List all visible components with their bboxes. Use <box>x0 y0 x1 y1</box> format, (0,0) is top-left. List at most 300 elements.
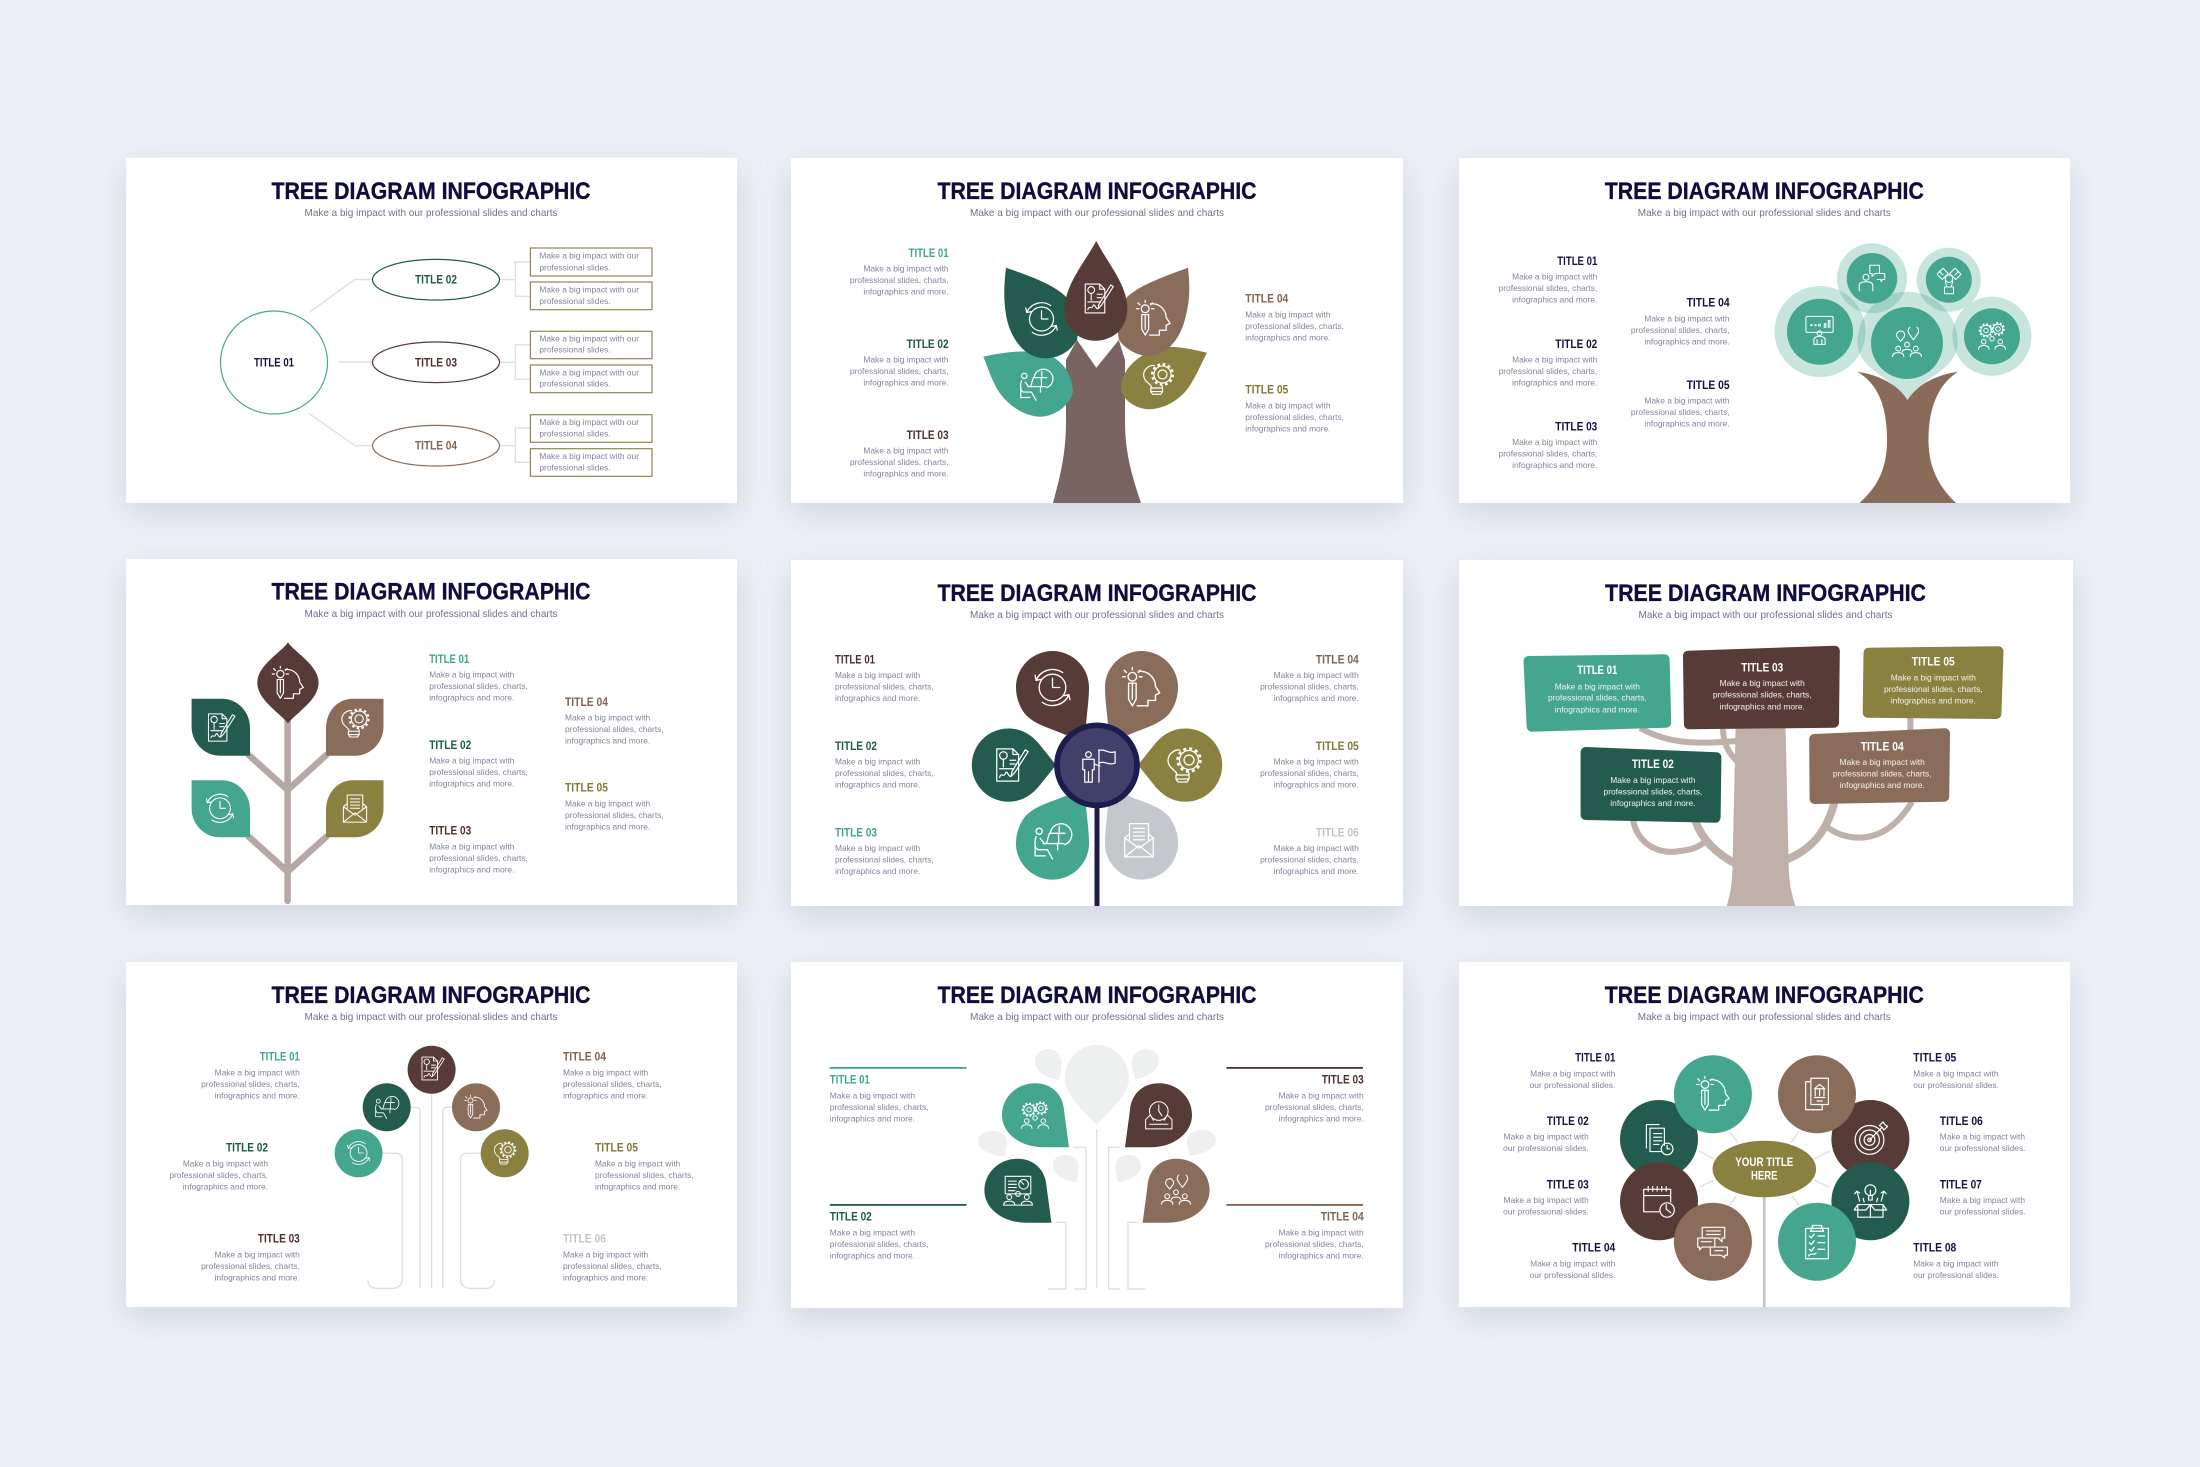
stem <box>1094 800 1100 906</box>
text: title 02: Make a big impact with <box>830 1228 915 1238</box>
text: title 06: infographics and more. <box>1274 866 1359 876</box>
text: title 01: infographics and more. <box>215 1090 300 1100</box>
text: title 02: infographics and more. <box>1512 378 1597 388</box>
text: title 04: professional slides, charts, <box>563 1079 662 1089</box>
panel 1: outline tree <box>126 158 737 503</box>
node: title 02 <box>372 259 500 300</box>
node: dark green <box>363 1083 411 1131</box>
text: title 05: Make a big impact with <box>1644 396 1730 406</box>
text: title 07: TITLE 07 <box>1940 1178 1982 1191</box>
text: title 02 <box>169 1142 268 1191</box>
card: title 02: TITLE 02 <box>1632 758 1674 771</box>
panel 2: leaf tree <box>791 158 1403 503</box>
text: title 01 <box>1499 255 1598 305</box>
node: teal <box>335 1129 383 1177</box>
heading <box>938 580 1256 621</box>
text: title 02: TITLE 02 <box>907 338 949 351</box>
text boxes: professional slides. <box>539 262 611 272</box>
text: title 01: Make a big impact with <box>429 670 515 680</box>
stem <box>1763 1195 1766 1307</box>
text: title 02: Make a big impact with <box>429 756 515 766</box>
text: title 01: TITLE 01 <box>830 1073 870 1086</box>
text: title 03: TITLE 03 <box>258 1233 300 1246</box>
node: olive <box>481 1129 529 1177</box>
leaf: dark brown <box>257 642 319 723</box>
text: title 01: professional slides, charts, <box>1499 283 1597 293</box>
text: title 04: Make a big impact with <box>1279 1228 1364 1238</box>
text: title 05: TITLE 05 <box>1245 384 1289 397</box>
node: title 02: TITLE 02 <box>415 274 457 287</box>
text: title 06: TITLE 06 <box>563 1233 606 1246</box>
text boxes: Make a big impact with our <box>539 451 639 461</box>
circle node: presentation <box>1787 299 1853 365</box>
text: title 06: Make a big impact with <box>1940 1132 2025 1142</box>
text: title 02: professional slides, charts, <box>850 366 949 376</box>
leaf: dark green <box>1004 268 1078 358</box>
heading <box>938 178 1256 219</box>
text: title 05: infographics and more. <box>1644 419 1730 429</box>
card: title 01: professional slides, charts, <box>1548 693 1647 703</box>
text: title 02: TITLE 02 <box>1547 1115 1589 1128</box>
text: title 03: professional slides, charts, <box>429 853 528 863</box>
root node: title 01 <box>220 311 328 414</box>
text: title 01: Make a big impact with <box>215 1067 300 1077</box>
text: title 03: professional slides, charts, <box>835 854 934 864</box>
text: title 01: Make a big impact with <box>1512 272 1598 282</box>
text: title 03: Make a big impact with <box>1512 437 1598 447</box>
card: title 01: infographics and more. <box>1555 704 1640 714</box>
text: title 04: infographics and more. <box>563 1090 648 1100</box>
text: title 01: our professional slides. <box>1530 1080 1615 1090</box>
text: title 06: Make a big impact with <box>563 1249 649 1259</box>
text: title 03: TITLE 03 <box>1555 420 1598 433</box>
text boxes: Make a big impact with our <box>539 251 639 261</box>
text: title 01: TITLE 01 <box>909 247 949 260</box>
text: title 03: Make a big impact with <box>835 843 921 853</box>
card: title 05: professional slides, charts, <box>1884 684 1983 694</box>
card: title 03 <box>1688 651 1835 724</box>
text: title 06 <box>1940 1115 2025 1153</box>
heading: Make a big impact with our professional slides and charts <box>304 609 558 620</box>
text: title 05: infographics and more. <box>1245 423 1331 433</box>
card: title 04: TITLE 04 <box>1861 741 1904 754</box>
text: title 02: Make a big impact with <box>1512 355 1598 365</box>
card: title 03: Make a big impact with <box>1720 678 1805 688</box>
heading: TREE DIAGRAM INFOGRAPHIC <box>938 580 1256 607</box>
circle: light brown building <box>1778 1055 1856 1133</box>
text: title 05: professional slides, charts, <box>1631 407 1730 417</box>
text boxes: Make a big impact with our <box>539 417 639 427</box>
text: title 01: infographics and more. <box>429 693 514 703</box>
petal: light brown <box>1105 651 1178 735</box>
circle node: gears <box>1964 308 2020 364</box>
heading: TREE DIAGRAM INFOGRAPHIC <box>1605 580 1926 607</box>
text: title 05: TITLE 05 <box>1913 1052 1957 1065</box>
text: title 04 <box>1245 293 1344 342</box>
text: title 02: TITLE 02 <box>226 1142 268 1155</box>
text: title 05 <box>1631 379 1730 429</box>
petal: olive <box>1138 728 1222 802</box>
text: title 04: our professional slides. <box>1530 1270 1615 1280</box>
text: title 03: TITLE 03 <box>429 825 472 838</box>
text: title 01: TITLE 01 <box>260 1051 300 1064</box>
leaf: dark green <box>192 699 250 756</box>
text: title 05: Make a big impact with <box>1245 400 1331 410</box>
text: title 03 <box>201 1233 300 1282</box>
text boxes: Make a big impact with our <box>539 333 639 343</box>
text: title 01: infographics and more. <box>1512 295 1597 305</box>
text: title 02: professional slides, charts, <box>1499 366 1597 376</box>
text: title 01 <box>201 1051 300 1100</box>
card: title 01: TITLE 01 <box>1577 664 1618 677</box>
text: title 04: infographics and more. <box>565 736 650 746</box>
text: title 06 <box>1260 826 1359 876</box>
text: title 02 <box>830 1210 928 1260</box>
text: title 04 <box>1265 1210 1364 1260</box>
circle: teal <box>1674 1055 1752 1133</box>
text: title 02: infographics and more. <box>429 779 514 789</box>
panel 4: branch tree <box>126 559 737 905</box>
text: title 02: Make a big impact with <box>835 757 921 767</box>
text: title 04: Make a big impact with <box>1530 1258 1616 1268</box>
text: title 01: Make a big impact with <box>1530 1068 1616 1078</box>
text: title 01: Make a big impact with <box>835 670 921 680</box>
card: title 05 <box>1868 651 1998 714</box>
heading: TREE DIAGRAM INFOGRAPHIC <box>272 982 590 1009</box>
text: title 01: TITLE 01 <box>835 653 875 666</box>
text: title 04: infographics and more. <box>1274 693 1359 703</box>
card: title 03: professional slides, charts, <box>1713 690 1812 700</box>
text: title 03: infographics and more. <box>1278 1114 1364 1124</box>
circle node: locations <box>1871 307 1943 379</box>
text: title 01: TITLE 01 <box>429 653 470 666</box>
center node: person with flag <box>1057 725 1137 805</box>
text: title 03: TITLE 03 <box>835 826 877 839</box>
circle: dark green box <box>1831 1162 1909 1240</box>
text: title 02: infographics and more. <box>863 378 949 388</box>
text: title 03: infographics and more. <box>835 866 920 876</box>
text: title 07: our professional slides. <box>1940 1207 2025 1217</box>
text: title 04 <box>1530 1242 1616 1280</box>
card: title 01 <box>1528 659 1666 727</box>
leaf: teal <box>192 780 250 837</box>
text boxes <box>530 248 652 476</box>
node: dark brown <box>408 1046 456 1094</box>
node: title 03 <box>372 342 500 383</box>
text: title 01 <box>830 1073 928 1124</box>
heading: TREE DIAGRAM INFOGRAPHIC <box>272 178 590 205</box>
heading: Make a big impact with our professional slides and charts <box>304 1012 558 1023</box>
text: title 02: infographics and more. <box>183 1181 268 1191</box>
text: title 07 <box>1940 1178 2025 1216</box>
tree trunk and branches <box>1633 716 1912 906</box>
text: title 03: professional slides, charts, <box>1499 448 1597 458</box>
heading: Make a big impact with our professional slides and charts <box>304 208 558 219</box>
text: title 02: TITLE 02 <box>835 740 877 753</box>
node: light brown <box>452 1083 500 1131</box>
card: title 03: TITLE 03 <box>1741 661 1784 674</box>
tree trunk <box>1053 340 1141 503</box>
text: title 01: infographics and more. <box>835 693 920 703</box>
text: title 04 <box>563 1051 662 1100</box>
text: title 03: professional slides, charts, <box>201 1261 300 1271</box>
text: title 03 <box>850 429 949 479</box>
text: title 02: Make a big impact with <box>863 355 949 365</box>
text: title 04: Make a big impact with <box>1644 313 1730 323</box>
text: title 04: TITLE 04 <box>1687 297 1730 310</box>
text: title 01: professional slides, charts, <box>429 681 528 691</box>
text: title 04 <box>565 696 664 746</box>
branches <box>249 720 326 901</box>
card: title 04 <box>1814 733 1945 799</box>
text: title 04: TITLE 04 <box>1245 293 1289 306</box>
text boxes: professional slides. <box>539 429 611 439</box>
circle: light brown <box>1674 1203 1752 1281</box>
text: title 03 <box>1503 1178 1589 1216</box>
text: title 01 <box>835 653 934 703</box>
petal: teal <box>1016 796 1089 880</box>
text: title 04: TITLE 04 <box>565 696 608 709</box>
text: title 06: Make a big impact with <box>1274 843 1359 853</box>
tree trunk <box>1857 372 1958 503</box>
card: title 02: professional slides, charts, <box>1604 787 1702 797</box>
card: title 03: infographics and more. <box>1720 701 1805 711</box>
text: title 05: Make a big impact with <box>1274 757 1359 767</box>
text: title 03 <box>1265 1073 1364 1124</box>
heading <box>1605 982 1924 1023</box>
leaf: light brown <box>1118 268 1189 356</box>
text: title 04: TITLE 04 <box>563 1051 606 1064</box>
circle: dark brown target <box>1831 1100 1909 1178</box>
text: title 04: TITLE 04 <box>1321 1210 1364 1223</box>
heading: TREE DIAGRAM INFOGRAPHIC <box>272 579 590 606</box>
text: title 01 <box>429 653 528 703</box>
panel 9: radial circles tree <box>1459 962 2070 1307</box>
card: title 04: Make a big impact with <box>1840 757 1925 767</box>
card: title 04: professional slides, charts, <box>1833 769 1932 779</box>
card: title 05: infographics and more. <box>1891 695 1976 705</box>
text: title 01: infographics and more. <box>830 1114 915 1124</box>
text: title 05: our professional slides. <box>1913 1080 1999 1090</box>
rule: title 02 <box>830 1204 966 1206</box>
text: title 04: infographics and more. <box>1644 336 1730 346</box>
card: title 05: Make a big impact with <box>1891 672 1976 682</box>
card: title 02 <box>1586 752 1716 818</box>
text: title 05: TITLE 05 <box>565 782 608 795</box>
text: title 03 <box>835 826 934 876</box>
text: title 02: professional slides, charts, <box>830 1239 928 1249</box>
text boxes: Make a big impact with our <box>539 285 639 295</box>
heading: Make a big impact with our professional slides and charts <box>1638 208 1891 219</box>
text boxes: professional slides. <box>539 379 611 389</box>
text: title 02 <box>850 338 949 388</box>
text: title 01: Make a big impact with <box>863 264 949 274</box>
text: title 06: TITLE 06 <box>1316 826 1359 839</box>
circle: dark brown <box>1620 1162 1698 1240</box>
drop: dark green <box>984 1159 1051 1223</box>
text: title 01: professional slides, charts, <box>201 1079 300 1089</box>
heading: TREE DIAGRAM INFOGRAPHIC <box>938 982 1256 1009</box>
text: title 03: our professional slides. <box>1503 1207 1589 1217</box>
circle: dark green <box>1620 1100 1698 1178</box>
text: title 03: Make a big impact with <box>215 1249 300 1259</box>
text: title 04: infographics and more. <box>1278 1251 1364 1261</box>
text: title 05 <box>1913 1052 1999 1090</box>
circle node: discussion <box>1847 253 1897 304</box>
text: title 03: TITLE 03 <box>1547 1178 1589 1191</box>
card: title 02: infographics and more. <box>1610 798 1696 808</box>
leaf: dark brown <box>1064 241 1127 341</box>
heading: TREE DIAGRAM INFOGRAPHIC <box>938 178 1256 205</box>
text: title 05: Make a big impact with <box>595 1158 681 1168</box>
text: title 06: professional slides, charts, <box>1260 854 1359 864</box>
text: title 06: infographics and more. <box>563 1272 648 1282</box>
text: title 04: professional slides, charts, <box>565 724 664 734</box>
text: title 05: professional slides, charts, <box>565 810 664 820</box>
text: title 02: Make a big impact with <box>183 1158 268 1168</box>
panel 5: flower tree <box>791 560 1403 906</box>
text: title 05: TITLE 05 <box>595 1142 638 1155</box>
text: title 05: professional slides, charts, <box>595 1170 694 1180</box>
text: title 05: TITLE 05 <box>1687 379 1730 392</box>
text: title 02: professional slides, charts, <box>429 767 528 777</box>
text: title 03: Make a big impact with <box>1279 1091 1364 1101</box>
text boxes: professional slides. <box>539 296 611 306</box>
heading: TREE DIAGRAM INFOGRAPHIC <box>1605 178 1924 205</box>
text: title 02 <box>1499 338 1598 388</box>
text: title 01: infographics and more. <box>863 287 949 297</box>
card: title 02: Make a big impact with <box>1610 775 1696 785</box>
text: title 02: TITLE 02 <box>429 739 471 752</box>
text: title 04: Make a big impact with <box>565 713 651 723</box>
text: title 05: infographics and more. <box>595 1181 680 1191</box>
text: title 05: professional slides, charts, <box>1260 768 1359 778</box>
petal: dark brown <box>1016 651 1089 735</box>
text: title 01 <box>1530 1052 1616 1090</box>
text: title 03: infographics and more. <box>863 469 949 479</box>
text: title 02: our professional slides. <box>1503 1143 1589 1153</box>
text: title 06 <box>563 1233 662 1282</box>
background gray leaves <box>978 1045 1216 1182</box>
canopy halos <box>1774 243 2032 400</box>
drop: teal <box>1002 1083 1069 1147</box>
drop: dark brown <box>1125 1083 1192 1147</box>
text: title 02: infographics and more. <box>835 780 920 790</box>
circle: teal clipboard <box>1778 1203 1856 1281</box>
heading <box>272 982 590 1023</box>
heading <box>938 982 1256 1023</box>
heading: Make a big impact with our professional slides and charts <box>1638 610 1892 621</box>
text: title 05: infographics and more. <box>565 821 650 831</box>
text: title 03 <box>1499 420 1598 470</box>
text: title 02: TITLE 02 <box>830 1210 872 1223</box>
text: title 06: our professional slides. <box>1940 1143 2025 1153</box>
text: title 05 <box>565 782 664 831</box>
heading: Make a big impact with our professional slides and charts <box>970 1012 1224 1023</box>
root node: title 01: TITLE 01 <box>254 357 294 370</box>
text: title 08: our professional slides. <box>1913 1270 1999 1280</box>
text: title 06: professional slides, charts, <box>563 1261 662 1271</box>
text: title 08: Make a big impact with <box>1913 1258 1999 1268</box>
text: title 03: infographics and more. <box>429 864 514 874</box>
text: title 04: Make a big impact with <box>1245 309 1331 319</box>
panel 6: labelled box tree <box>1459 560 2073 906</box>
text: title 03: professional slides, charts, <box>1265 1102 1364 1112</box>
circle node: teamwork <box>1926 257 1972 303</box>
text: title 04: professional slides, charts, <box>1631 325 1730 335</box>
panel 3: circle canopy tree <box>1459 158 2070 503</box>
text: title 05: Make a big impact with <box>565 798 651 808</box>
text: title 01: TITLE 01 <box>1575 1052 1616 1065</box>
heading <box>1605 580 1926 621</box>
text: title 01: professional slides, charts, <box>835 681 934 691</box>
text: title 01 <box>850 247 949 297</box>
text: title 02 <box>429 739 528 789</box>
text: title 04: professional slides, charts, <box>1265 1239 1364 1249</box>
text: title 02: TITLE 02 <box>1555 338 1597 351</box>
leaf: olive <box>1121 347 1207 409</box>
node: title 03: TITLE 03 <box>415 356 457 369</box>
text: title 05: professional slides, charts, <box>1245 412 1344 422</box>
text: title 03: Make a big impact with <box>863 446 949 456</box>
petal: dark green <box>972 728 1056 802</box>
text: title 04: professional slides, charts, <box>1260 681 1359 691</box>
card: title 01: Make a big impact with <box>1555 681 1640 691</box>
text: title 03: infographics and more. <box>215 1272 300 1282</box>
text: title 01: Make a big impact with <box>830 1091 915 1101</box>
text: title 02 <box>835 740 934 790</box>
heading: Make a big impact with our professional slides and charts <box>970 610 1224 621</box>
text: title 05: TITLE 05 <box>1316 740 1359 753</box>
text: title 03: infographics and more. <box>1512 460 1597 470</box>
text: title 05 <box>1260 740 1359 790</box>
text: title 02: professional slides, charts, <box>169 1170 268 1180</box>
text: title 04 <box>1631 297 1730 346</box>
leaf: teal <box>983 351 1073 417</box>
center node: your title here: HERE <box>1751 1169 1778 1182</box>
text: title 03: professional slides, charts, <box>850 457 949 467</box>
text: title 03: TITLE 03 <box>907 429 949 442</box>
text: title 04: professional slides, charts, <box>1245 321 1344 331</box>
rule: title 01 <box>830 1067 966 1069</box>
rule: title 04 <box>1226 1204 1363 1206</box>
text: title 03: Make a big impact with <box>1504 1195 1589 1205</box>
text: title 01: TITLE 01 <box>1557 255 1598 268</box>
text: title 04 <box>1260 653 1359 703</box>
text boxes: professional slides. <box>539 345 611 355</box>
text: title 02: Make a big impact with <box>1504 1132 1589 1142</box>
text: title 07: Make a big impact with <box>1940 1195 2025 1205</box>
text: title 02: professional slides, charts, <box>835 768 934 778</box>
text: title 04: Make a big impact with <box>563 1067 649 1077</box>
leaf: light brown <box>326 699 384 756</box>
card: title 04: infographics and more. <box>1840 780 1925 790</box>
card: title 05: TITLE 05 <box>1912 656 1955 669</box>
heading: Make a big impact with our professional slides and charts <box>970 208 1224 219</box>
center node: your title here: YOUR TITLE <box>1735 1156 1794 1169</box>
leaf: olive <box>326 780 384 837</box>
text: title 02: infographics and more. <box>830 1251 915 1261</box>
node: title 04 <box>372 425 500 466</box>
petal: gray <box>1105 796 1178 880</box>
text boxes: Make a big impact with our <box>539 367 639 377</box>
text: title 04: TITLE 04 <box>1572 1242 1616 1255</box>
text: title 05: infographics and more. <box>1274 780 1359 790</box>
text boxes: professional slides. <box>539 462 611 472</box>
text: title 08 <box>1913 1242 1999 1280</box>
text: title 04: TITLE 04 <box>1316 653 1359 666</box>
text: title 04: infographics and more. <box>1245 332 1331 342</box>
